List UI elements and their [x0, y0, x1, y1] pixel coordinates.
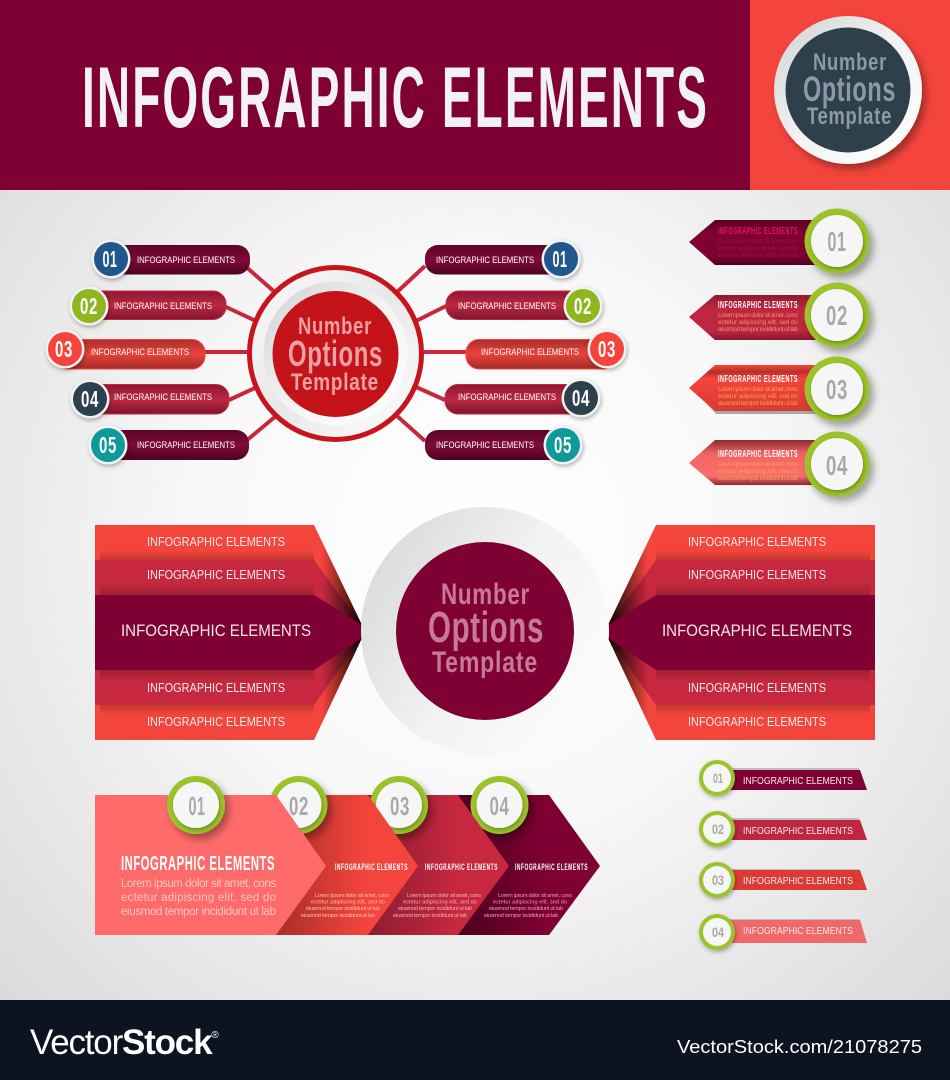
- central circle: mind map hub: [250, 268, 422, 440]
- chevron step 03: 03: [390, 791, 410, 821]
- panel: right layered arrow: INFOGRAPHIC ELEMENTS: [688, 715, 826, 729]
- right pill 03: [466, 330, 626, 369]
- arrow ribbon 02: 02: [826, 300, 848, 331]
- arrow ribbon 04: eiusmod tempor incididunt ut lab: [718, 475, 798, 482]
- arrow ribbon 03: ectetur adipiscing elit, sed do: [718, 393, 798, 400]
- left pill 05: INFOGRAPHIC ELEMENTS: [137, 440, 235, 450]
- footer: vectorstock bar: VectorStock: [30, 1023, 211, 1062]
- arrow ribbon 03: 03: [826, 374, 848, 405]
- small banner 04: [699, 914, 867, 950]
- arrow ribbon 02: INFOGRAPHIC ELEMENTS: [718, 299, 798, 311]
- header badge: number options template: Options: [803, 70, 896, 109]
- arrow ribbon 02: Lorem ipsum dolor sit amet, cons: [718, 312, 799, 319]
- small banner 01: 01: [713, 770, 723, 786]
- arrow ribbon 02: eiusmod tempor incididunt ut lab: [718, 326, 798, 333]
- panel: left layered arrow: INFOGRAPHIC ELEMENTS: [147, 681, 285, 695]
- arrow ribbon 01: Lorem ipsum dolor sit amet, cons: [718, 238, 799, 245]
- left pill 01: 01: [102, 246, 118, 272]
- chevron step 02: ectetur adipiscing elit, sed do: [311, 900, 385, 906]
- panel: right layered arrow: INFOGRAPHIC ELEMENTS: [688, 568, 826, 582]
- right pill 02: INFOGRAPHIC ELEMENTS: [458, 301, 556, 311]
- background: [0, 190, 950, 1000]
- right pill 05: [425, 426, 582, 464]
- right pill 03: 03: [598, 336, 616, 362]
- header badge: number options template: Number: [813, 49, 887, 76]
- panel: right layered arrow: INFOGRAPHIC ELEMENTS: [662, 621, 852, 640]
- header badge: number options template: Template: [807, 103, 892, 130]
- chevron step 02: 02: [289, 791, 309, 821]
- arrow ribbon 01: eiusmod tempor incididunt ut lab: [718, 252, 798, 259]
- central badge: Number: [441, 578, 530, 611]
- chevron step 04: eiusmod tempor incididunt ut lab: [489, 906, 563, 912]
- chevron step 03: eiusmod tempor incididunt ut lab: [393, 913, 467, 919]
- small banner 02: [699, 811, 867, 847]
- small banner 01: [699, 760, 867, 796]
- chevron step 04: Lorem ipsum dolor sit amet, cons: [498, 893, 572, 899]
- right pill 02: [446, 286, 602, 326]
- right pill 04: [445, 378, 600, 418]
- chevron step 01: Lorem ipsum dolor sit amet, cons: [121, 878, 276, 890]
- left pill 02: 02: [80, 293, 98, 319]
- header band: [0, 0, 950, 190]
- panel: right layered arrow: INFOGRAPHIC ELEMENTS: [688, 681, 826, 695]
- arrow ribbon 01: 01: [828, 226, 846, 257]
- chevron step 01: eiusmod tempor incididunt ut lab: [121, 906, 276, 918]
- small banner 03: INFOGRAPHIC ELEMENTS: [743, 876, 853, 887]
- left pill 04: [70, 380, 229, 418]
- panel: right layered arrow: [608, 525, 875, 740]
- chevron step 04: eiusmod tempor incididunt ut lab: [484, 913, 558, 919]
- central badge: Options: [428, 603, 544, 652]
- left pill 04: INFOGRAPHIC ELEMENTS: [114, 392, 212, 402]
- small banner 04: INFOGRAPHIC ELEMENTS: [743, 926, 853, 937]
- panel: left layered arrow: [95, 525, 362, 740]
- small banner 03: [699, 862, 867, 898]
- central badge: [361, 507, 609, 755]
- panel: right layered arrow: INFOGRAPHIC ELEMENTS: [688, 535, 826, 549]
- arrow ribbon 01: ectetur adipiscing elit, sed do: [718, 245, 798, 252]
- arrow ribbon 02: [689, 282, 870, 348]
- header badge: number options template: [774, 16, 922, 164]
- arrow ribbon 04: ectetur adipiscing elit, sed do: [718, 468, 798, 475]
- left pill 03: [46, 330, 205, 369]
- arrow ribbon 03: INFOGRAPHIC ELEMENTS: [718, 373, 798, 385]
- chevron step 03: INFOGRAPHIC ELEMENTS: [425, 862, 498, 873]
- small banner 04: 04: [712, 924, 724, 940]
- left pill 04: 04: [81, 386, 99, 412]
- left pill 05: [88, 426, 249, 464]
- central badge: Template: [432, 646, 538, 679]
- left pill 01: INFOGRAPHIC ELEMENTS: [137, 255, 235, 265]
- chevron step 02: [270, 776, 418, 935]
- chevron step 02: Lorem ipsum dolor sit amet, cons: [315, 893, 389, 899]
- small banner 03: 03: [712, 872, 724, 888]
- footer: vectorstock bar: VectorStock.com/21078275: [677, 1037, 922, 1057]
- right pill 01: INFOGRAPHIC ELEMENTS: [436, 255, 534, 265]
- chevron step 04: ectetur adipiscing elit, sed do: [493, 900, 567, 906]
- chevron step 01: [95, 776, 326, 935]
- footer: vectorstock bar: ®: [211, 1030, 219, 1041]
- small banner 01: INFOGRAPHIC ELEMENTS: [743, 776, 853, 787]
- right pill 01: [425, 240, 580, 278]
- central circle: mind map hub: Options: [288, 333, 383, 374]
- footer: vectorstock bar: [0, 1000, 950, 1080]
- left pill 05: 05: [99, 432, 117, 458]
- chevron step 04: INFOGRAPHIC ELEMENTS: [515, 862, 588, 873]
- chevron step 01: 01: [188, 791, 206, 821]
- panel: left layered arrow: INFOGRAPHIC ELEMENTS: [147, 535, 285, 549]
- chevron step 01: ectetur adipiscing elit, sed do: [121, 892, 276, 904]
- left pill 03: 03: [55, 336, 73, 362]
- chevron step 01: INFOGRAPHIC ELEMENTS: [121, 853, 275, 875]
- chevron step 02: eiusmod tempor incididunt ut lab: [301, 913, 375, 919]
- central circle: mind map hub: Number: [298, 313, 372, 340]
- chevron step 02: INFOGRAPHIC ELEMENTS: [335, 862, 408, 873]
- arrow ribbon 03: Lorem ipsum dolor sit amet, cons: [718, 386, 799, 393]
- chevron step 02: eiusmod tempor incididunt ut lab: [306, 906, 380, 912]
- panel: left layered arrow: INFOGRAPHIC ELEMENTS: [147, 568, 285, 582]
- connector lines: [205, 266, 466, 441]
- arrow ribbon 04: INFOGRAPHIC ELEMENTS: [718, 448, 798, 460]
- chevron step 03: eiusmod tempor incididunt ut lab: [398, 906, 472, 912]
- right pill 05: 05: [554, 432, 572, 458]
- right pill 02: 02: [574, 293, 592, 319]
- left pill 03: INFOGRAPHIC ELEMENTS: [91, 347, 189, 357]
- small banner 02: 02: [712, 821, 724, 837]
- left pill 02: [70, 286, 226, 326]
- arrow ribbon 04: 04: [826, 450, 848, 481]
- panel: left layered arrow: INFOGRAPHIC ELEMENTS: [147, 715, 285, 729]
- chevron step 04: 04: [490, 791, 510, 821]
- arrow ribbon 03: [689, 356, 870, 422]
- arrow ribbon 04: Lorem ipsum dolor sit amet, cons: [718, 461, 799, 468]
- right pill 05: INFOGRAPHIC ELEMENTS: [436, 440, 534, 450]
- left pill 01: [92, 240, 250, 278]
- right pill 04: 04: [572, 385, 590, 411]
- arrow ribbon 04: [689, 432, 870, 496]
- chevron step 04: [458, 776, 600, 935]
- arrow ribbon 01: INFOGRAPHIC ELEMENTS: [718, 225, 798, 237]
- panel: left layered arrow: INFOGRAPHIC ELEMENTS: [121, 621, 311, 640]
- right pill 03: INFOGRAPHIC ELEMENTS: [481, 347, 579, 357]
- left pill 02: INFOGRAPHIC ELEMENTS: [114, 301, 212, 311]
- central circle: mind map hub: Template: [291, 369, 379, 396]
- right pill 01: 01: [552, 246, 568, 272]
- small banner 02: INFOGRAPHIC ELEMENTS: [743, 826, 853, 837]
- arrow ribbon 01: [689, 208, 870, 274]
- arrow ribbon 02: ectetur adipiscing elit, sed do: [718, 319, 798, 326]
- chevron step 03: Lorem ipsum dolor sit amet, cons: [407, 893, 481, 899]
- right pill 04: INFOGRAPHIC ELEMENTS: [458, 392, 556, 402]
- chevron step 03: ectetur adipiscing elit, sed do: [403, 900, 477, 906]
- arrow ribbon 03: eiusmod tempor incididunt ut lab: [718, 400, 798, 407]
- chevron step 03: [368, 776, 509, 935]
